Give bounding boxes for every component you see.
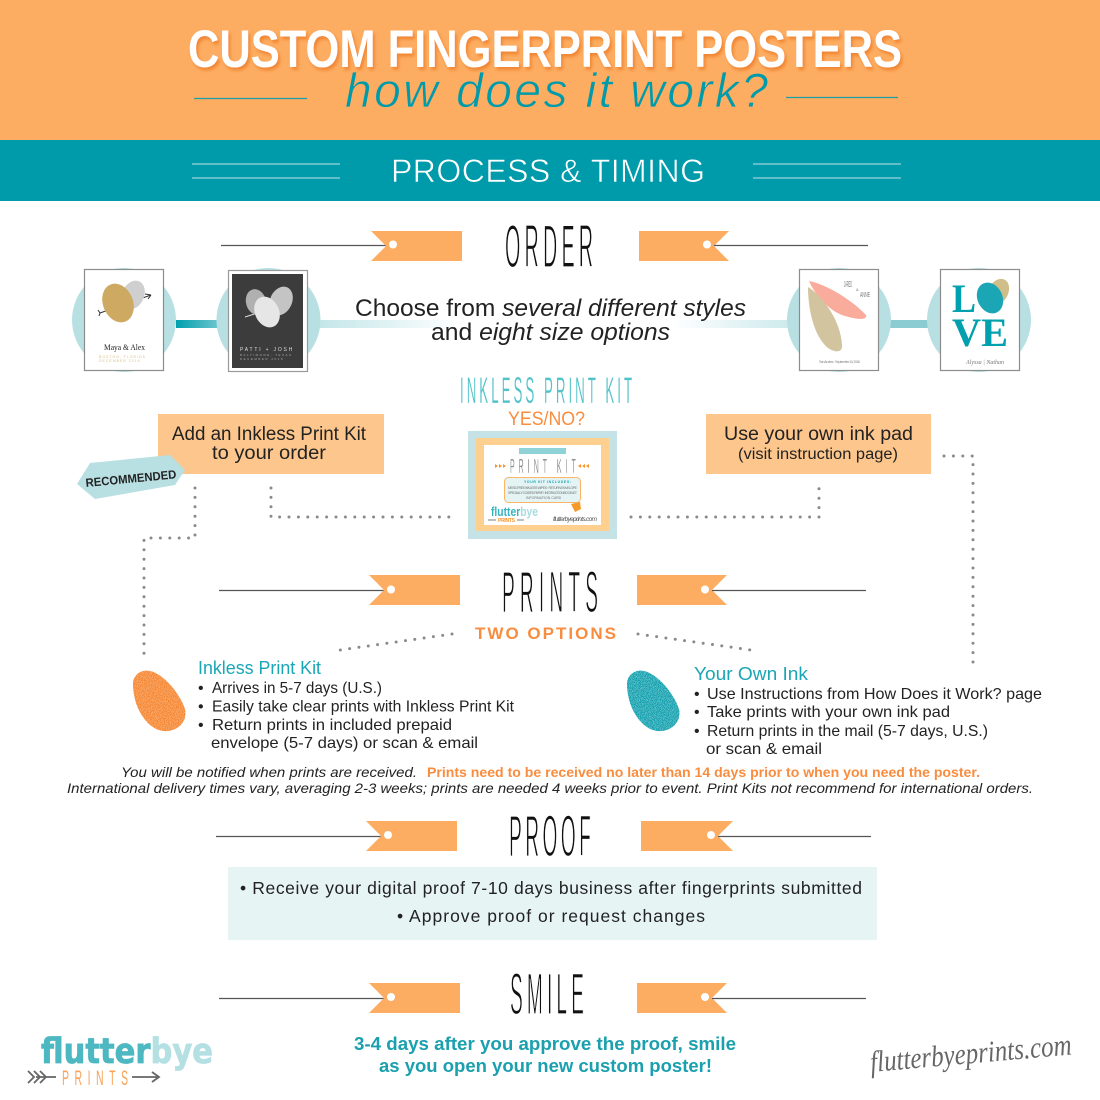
section heading: smile: SMILE xyxy=(510,963,584,1027)
order description text xyxy=(355,295,746,346)
option: inkless print kit: Easily take clear prints with Inkless Print Kit xyxy=(212,698,515,716)
box: add inkless print kit: Add an Inkless Print Kit xyxy=(172,424,367,445)
section banner: process and timing: PROCESS & TIMING xyxy=(391,153,705,189)
section heading: prints xyxy=(219,561,866,643)
print kit card xyxy=(468,431,617,539)
section heading: order: ORDER xyxy=(505,215,593,280)
dotted connector: inkless kit to inkless option xyxy=(144,488,195,655)
print kit card: PRINTS xyxy=(498,518,516,524)
poster: love: L xyxy=(952,276,976,321)
poster: love: Alyssa | Nathan xyxy=(965,360,1004,366)
timing notes: International delivery times vary, averaging 2-3 weeks; prints are needed 4 weeks prior to event. Print Kits not recommend for international orders. xyxy=(67,780,1033,796)
poster: Maya and Alex xyxy=(84,270,164,370)
fingerprint: teal xyxy=(627,671,679,731)
inkless print kit heading: YES/NO? xyxy=(508,409,585,430)
poster: Patti and Josh: PATTI + JOSH xyxy=(240,347,294,353)
option: your own ink: Take prints with your own ink pad xyxy=(707,704,950,721)
style circles xyxy=(72,268,1031,372)
box: use your own ink pad: Use your own ink pad xyxy=(724,424,913,445)
poster: feathers xyxy=(800,270,878,370)
box: use your own ink pad xyxy=(706,414,931,474)
closing message xyxy=(354,1033,736,1076)
dotted connector: order box to kit xyxy=(271,488,455,517)
option: your own ink: Return prints in the mail (5-7 days, U.S.) xyxy=(707,723,988,740)
section heading: order xyxy=(221,215,868,280)
poster: Patti and Josh xyxy=(228,270,308,372)
proof panel xyxy=(228,867,877,940)
option: your own ink: • xyxy=(694,686,700,703)
logo: flutterbye prints: flutterbye xyxy=(41,1032,213,1072)
poster: feathers: ANNE xyxy=(860,292,870,299)
logo: flutterbye prints xyxy=(28,1032,213,1090)
box: use your own ink pad: (visit instruction page) xyxy=(738,446,898,463)
dotted connector: two options left xyxy=(333,634,452,651)
recommended tag: RECOMMENDED xyxy=(85,467,177,490)
poster: love xyxy=(940,270,1020,370)
option: inkless print kit: • xyxy=(198,717,204,734)
section heading: proof xyxy=(216,805,871,869)
fingerprint: orange xyxy=(133,671,185,731)
option: your own ink: Your Own Ink xyxy=(694,663,809,684)
poster: Maya and Alex: BOSTON, FLORIDA xyxy=(99,355,146,359)
dotted connector: two options right xyxy=(638,634,758,651)
print kit card: SPECIALLY COATED PAPER · INSTRUCTION BOOKLET xyxy=(508,491,578,495)
section heading: proof: PROOF xyxy=(509,805,591,869)
option: your own ink xyxy=(694,663,1042,758)
dotted connector: ink pad to own ink option xyxy=(944,456,973,668)
recommended tag xyxy=(77,455,185,499)
poster: Maya and Alex: DECEMBER 2016 xyxy=(99,359,141,363)
poster: Patti and Josh: DECEMBER 2015 xyxy=(240,357,284,361)
timing notes xyxy=(67,764,1033,796)
box: add inkless print kit: to your order xyxy=(212,443,327,464)
option: inkless print kit: Return prints in included prepaid xyxy=(212,717,452,734)
poster: love: VE xyxy=(952,310,1008,355)
proof panel: • Approve proof or request changes xyxy=(397,906,705,926)
poster: Patti and Josh: BALTIMORE, TEXAS xyxy=(240,353,293,357)
poster: feathers: & xyxy=(856,287,859,292)
timing notes: Prints need to be received no later than 14 days prior to when you need the poster. xyxy=(427,764,980,780)
option: your own ink: Use Instructions from How Does it Work? page xyxy=(707,686,1042,703)
dotted connector: kit to ink pad box xyxy=(631,488,819,517)
closing message: as you open your new custom poster! xyxy=(379,1055,712,1076)
connector bars xyxy=(176,320,928,328)
poster: feathers: San Andres · September 10, 2016 xyxy=(819,360,860,364)
proof panel: • Receive your digital proof 7-10 days business after fingerprints submitted xyxy=(240,878,862,898)
section heading: prints: PRINTS xyxy=(502,561,598,625)
order description text: Choose from several different styles xyxy=(355,295,746,322)
order description text: and eight size options xyxy=(431,319,670,346)
print kit card: flutterbye xyxy=(491,504,538,519)
print kit card: flutterbyeprints.com xyxy=(553,516,598,523)
option: inkless print kit: • xyxy=(198,698,204,716)
poster: Maya and Alex: Maya & Alex xyxy=(104,342,146,352)
header banner xyxy=(0,0,1100,140)
option: inkless print kit: • xyxy=(198,680,204,697)
print kit card: MESS-FREE INKLESS WIPES · RETURN ENVELOPE xyxy=(508,486,578,490)
print kit card: INFORMATION CARD xyxy=(526,496,562,500)
print kit card: YOUR KIT INCLUDES: xyxy=(524,480,572,484)
subtitle: how does it work? xyxy=(345,65,768,118)
box: add inkless print kit xyxy=(158,414,384,474)
option: your own ink: or scan & email xyxy=(706,741,822,758)
option: inkless print kit xyxy=(198,657,515,752)
option: your own ink: • xyxy=(694,723,700,740)
section heading: smile xyxy=(219,963,866,1027)
option: inkless print kit: Inkless Print Kit xyxy=(198,657,321,678)
print kit card: PRINT KIT xyxy=(510,456,576,478)
option: inkless print kit: envelope (5-7 days) or scan & email xyxy=(211,735,478,752)
option: your own ink: • xyxy=(694,704,700,721)
closing message: 3-4 days after you approve the proof, smile xyxy=(354,1033,736,1054)
section banner: process and timing xyxy=(0,140,1100,201)
inkless print kit heading: INKLESS PRINT KIT xyxy=(460,370,632,411)
option: inkless print kit: Arrives in 5-7 days (U.S.) xyxy=(212,680,382,697)
title: CUSTOM FINGERPRINT POSTERS xyxy=(188,20,902,79)
section heading: prints: TWO OPTIONS xyxy=(475,624,616,643)
timing notes: You will be notified when prints are received. xyxy=(121,764,417,780)
logo: flutterbye prints: PRINTS xyxy=(62,1066,128,1090)
poster: feathers: JARED xyxy=(844,280,852,289)
inkless print kit heading xyxy=(460,370,632,430)
